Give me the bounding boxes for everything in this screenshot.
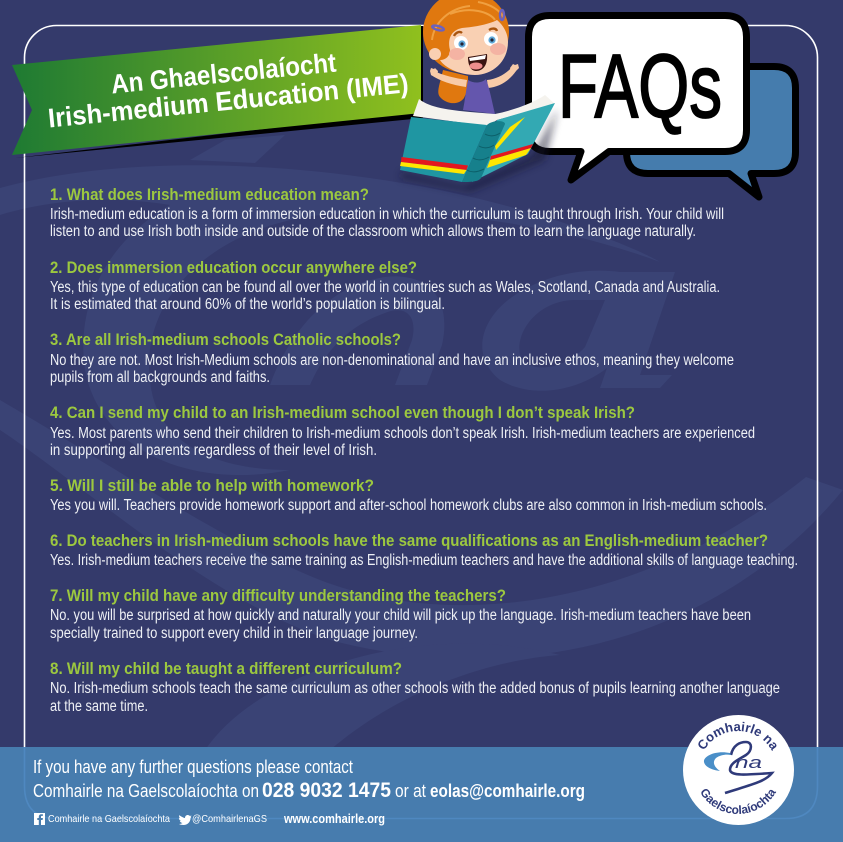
girl hair [423, 0, 509, 103]
book pages [413, 95, 555, 126]
FAQ 5 [50, 477, 767, 514]
girl ear [429, 48, 441, 60]
logo na: na [735, 753, 762, 772]
answer 7: specially trained to support every child in their language journey. [50, 625, 418, 642]
FAQ 6 [50, 532, 798, 569]
question 3: 3. Are all Irish-medium schools Catholic schools? [50, 331, 401, 349]
twitter handle: @ComhairlenaGS [192, 813, 267, 825]
girl hair clips [432, 10, 504, 31]
question 5: 5. Will I still be able to help with homework? [50, 477, 374, 495]
footer contact text: eolas@comhairle.org [430, 781, 585, 801]
title ribbon [12, 25, 423, 158]
answer 2: It is estimated that around 60% of the world’s population is bilingual. [50, 296, 445, 313]
answer 1 [50, 206, 724, 240]
FAQ 2 [50, 259, 720, 313]
book left cover [400, 117, 487, 182]
book right cover [472, 103, 555, 182]
answer 7 [50, 607, 751, 642]
icon: facebook [34, 813, 45, 825]
answer 8: at the same time. [50, 698, 148, 715]
girl hands [430, 64, 519, 77]
logo bottom arc text: Gaelscolaíochta [701, 789, 776, 814]
FAQ 3 [50, 331, 734, 386]
illustration: girl reading a book [400, 0, 558, 192]
book spine grooves [467, 133, 500, 172]
question 1: 1. What does Irish-medium education mean? [50, 186, 369, 204]
footer contact text: 028 9032 1475 [262, 779, 391, 802]
icon: twitter [179, 815, 192, 825]
footer contact text: Comhairle na Gaelscolaíochta on [33, 781, 259, 801]
logo swirl [725, 742, 772, 793]
book spine [462, 121, 505, 182]
girl cheeks [449, 43, 506, 60]
girl eyebrows [454, 29, 497, 36]
FAQ 4 [50, 404, 755, 459]
speech bubble: white with FAQs [528, 16, 746, 180]
girl mouth [468, 54, 487, 71]
girl face [440, 20, 508, 75]
girl arms [431, 67, 516, 88]
girl dress [463, 79, 495, 114]
question 7: 7. Will my child have any difficulty understanding the teachers? [50, 587, 506, 605]
answer 1: listen to and use Irish both inside and outside of the classroom which allows them to learn the language naturally. [50, 223, 696, 240]
question 8: 8. Will my child be taught a different curriculum? [50, 660, 402, 678]
footer social links [34, 811, 385, 826]
answer 4 [50, 425, 755, 459]
ribbon title text: An Ghaelscolaíocht [110, 48, 338, 99]
FAQ 8 [50, 660, 780, 715]
answer 3 [50, 352, 734, 386]
question 6: 6. Do teachers in Irish-medium schools have the same qualifications as an English-medium teacher? [50, 532, 768, 550]
answer 1: Irish-medium education is a form of immersion education in which the curriculum is taught through Irish. Your child will [50, 206, 724, 223]
footer contact text [33, 757, 585, 802]
girl eyes [454, 32, 498, 50]
FAQs heading: FAQs [558, 37, 722, 137]
question 2: 2. Does immersion education occur anywhere else? [50, 259, 417, 277]
logo top arc text: Comhairle na [698, 722, 776, 751]
watermark: large logo shapes [0, 135, 843, 750]
answer 3: pupils from all backgrounds and faiths. [50, 369, 270, 386]
speech bubble: blue [626, 66, 796, 197]
logo crescent [704, 752, 731, 771]
girl hair highlights [432, 2, 504, 40]
footer contact text: If you have any further questions please contact [33, 757, 353, 777]
logo: Comhairle na Gaelscolaíochta [683, 715, 794, 825]
FAQ 1 [50, 186, 724, 240]
book shadow [400, 108, 558, 192]
FAQ 7 [50, 587, 751, 642]
answer 8 [50, 680, 780, 715]
question 4: 4. Can I send my child to an Irish-medium school even though I don’t speak Irish? [50, 404, 635, 422]
ribbon title text: Irish-medium Education (IME) [47, 68, 410, 133]
facebook name: Comhairle na Gaelscolaíochta [48, 813, 170, 825]
answer 2 [50, 279, 720, 313]
footer contact text: or at [395, 781, 426, 801]
book right stripes [487, 117, 533, 168]
answer 4: in supporting all parents regardless of their level of Irish. [50, 442, 377, 459]
answer 2: Yes, this type of education can be found all over the world in countries such as Wales, Scotland, Canada and Australia. [50, 279, 720, 296]
book left stripes [400, 157, 468, 174]
website: www.comhairle.org [283, 811, 385, 826]
footer band [0, 747, 843, 842]
